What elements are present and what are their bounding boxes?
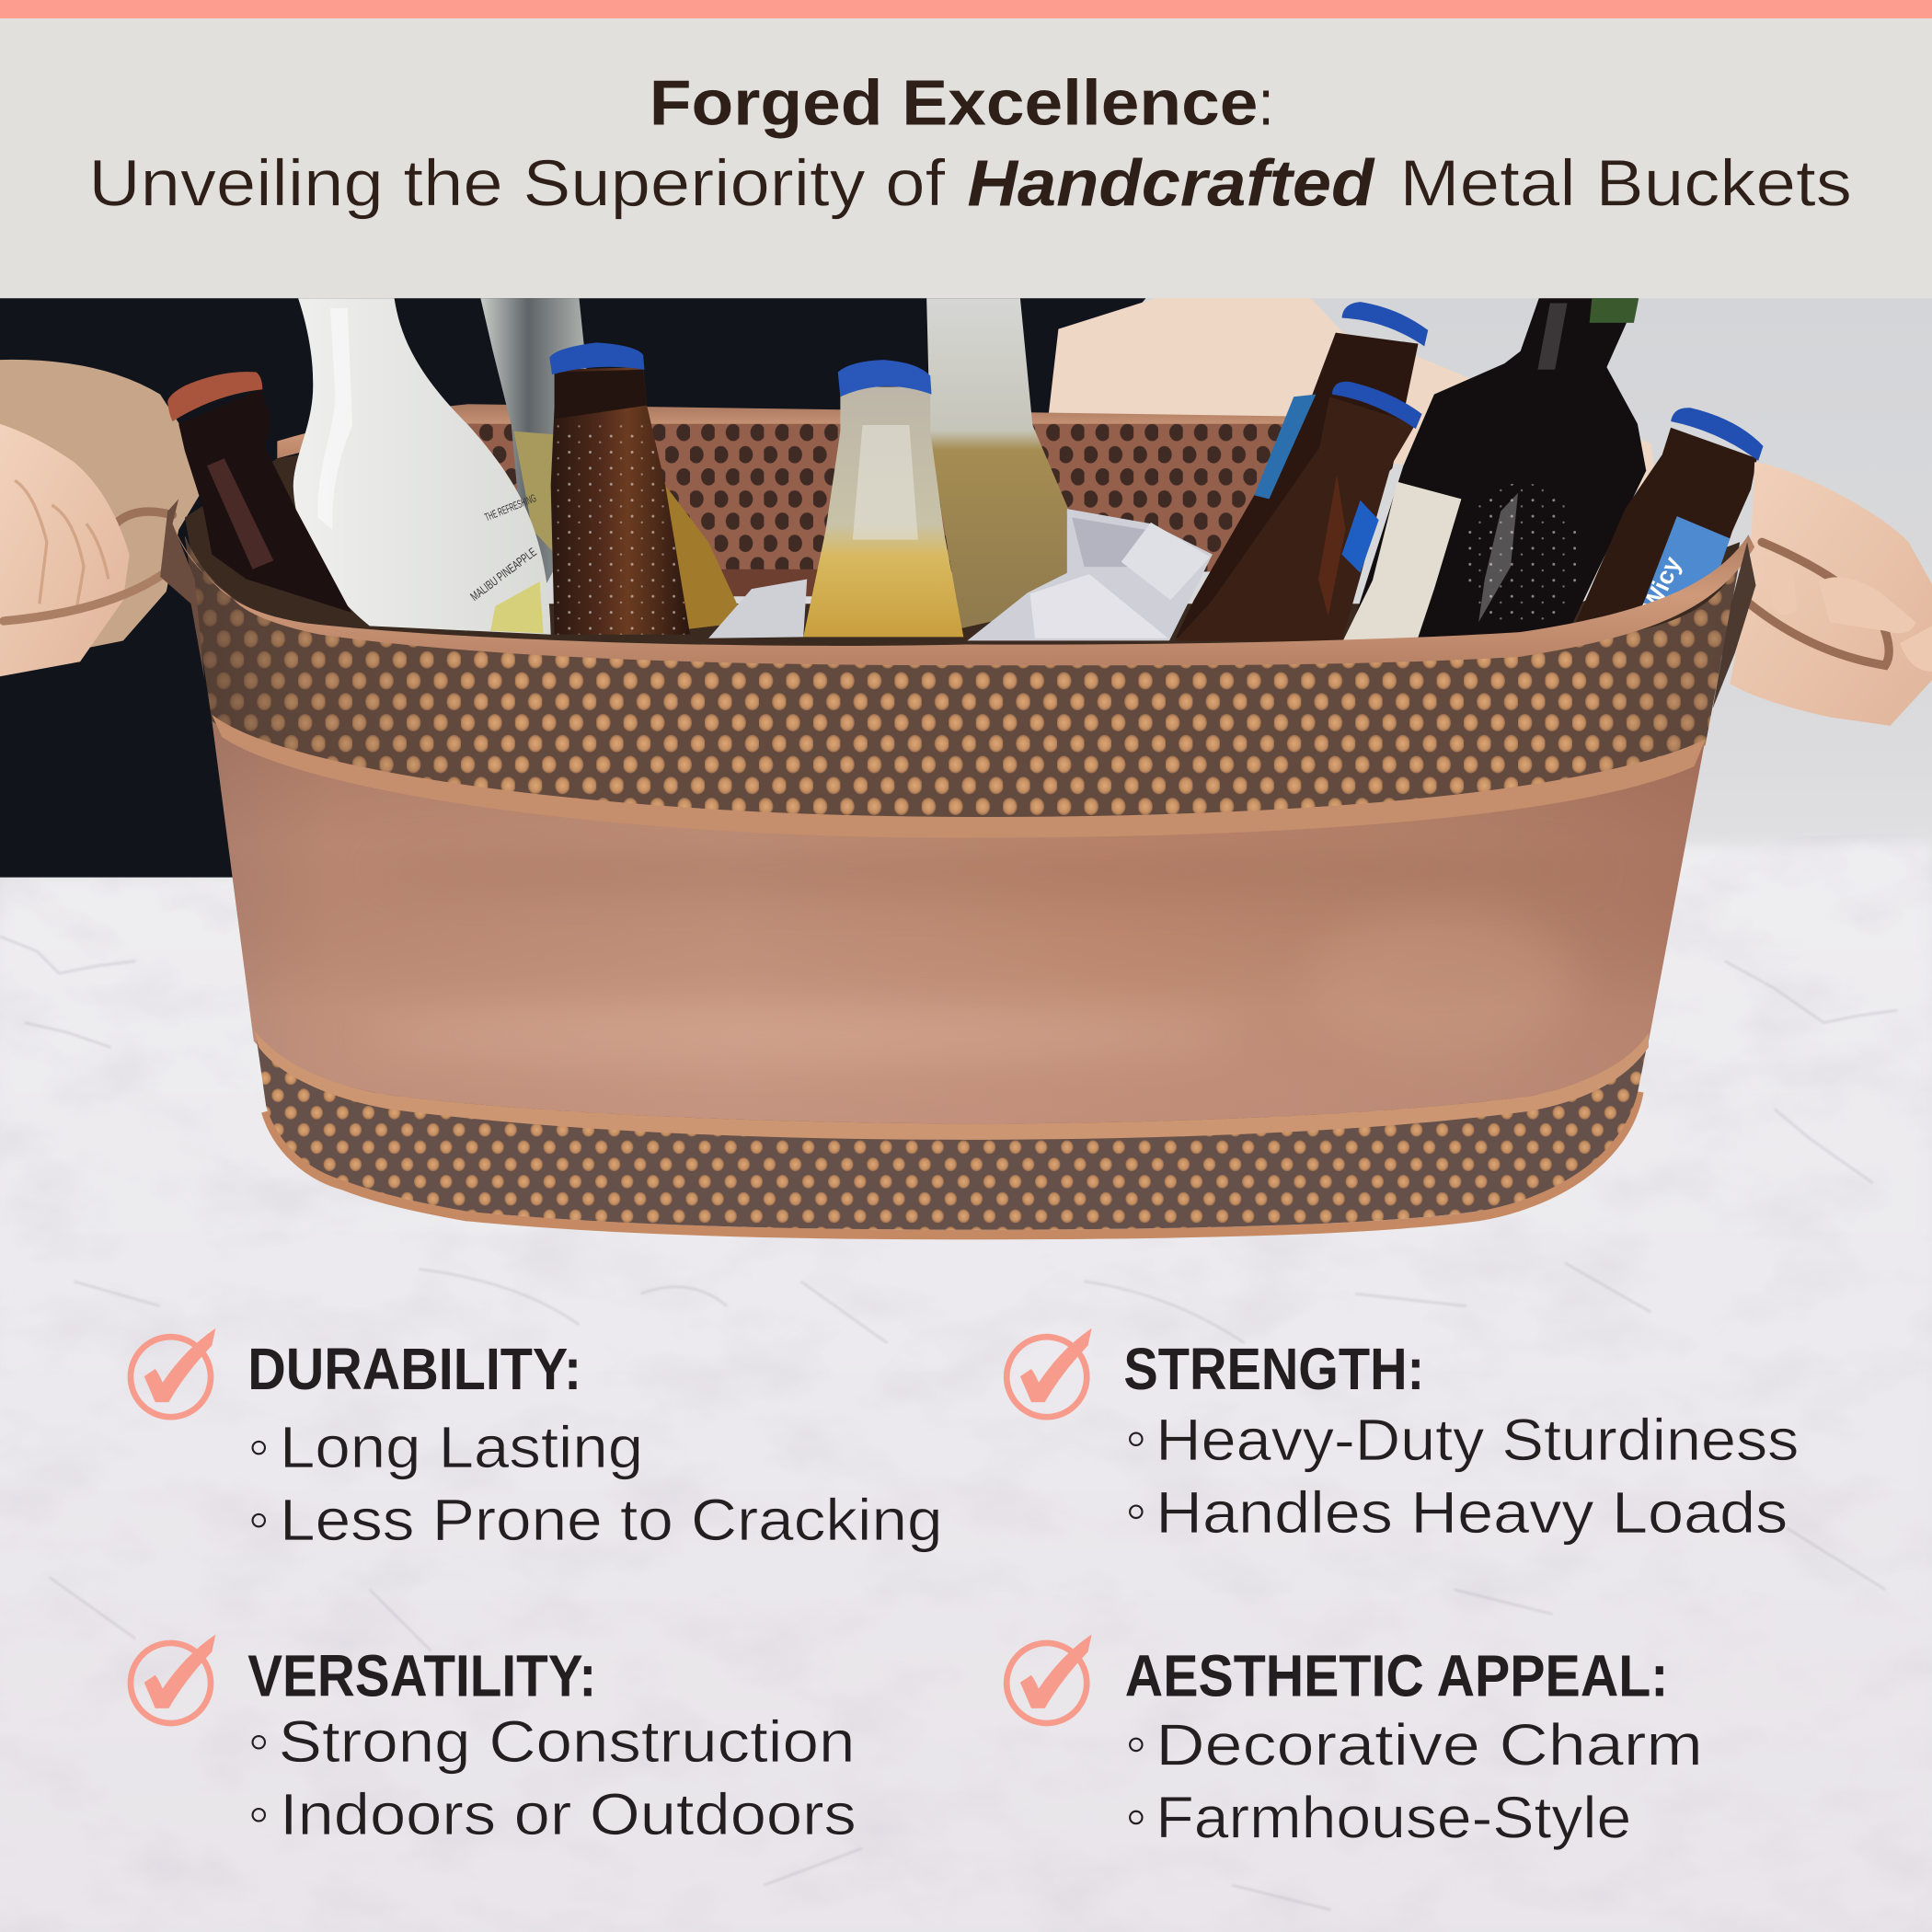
clear bottle, back left [480,298,587,592]
heading: STRENGTH: [1123,1336,1424,1402]
icon: check [1006,1328,1092,1417]
title: : [1258,66,1274,138]
right bracket [1713,542,1755,708]
top accent bar [0,0,1932,18]
marble countertop [0,813,1932,1932]
bullet text [253,1414,943,1553]
bullet text: Handles Heavy Loads [1156,1479,1788,1546]
brown bottle with blue label [1572,408,1764,631]
left hand [0,424,130,676]
bottom hammered band [257,1038,1649,1230]
subtitle: Unveiling the Superiority of [88,148,946,221]
amber bottle behind brown bottle [653,486,745,633]
bullet text [253,1708,857,1847]
feature: versatility [131,1635,857,1847]
heading: DURABILITY: [247,1336,581,1402]
bullet text [1130,1712,1703,1851]
yellow beer bottle [803,360,963,637]
person torso in black [0,298,1146,878]
left handle lower [4,571,167,621]
bullet text: Less Prone to Cracking [280,1487,943,1553]
bullet text: Long Lasting [280,1414,643,1480]
bullet text: Decorative Charm [1156,1712,1703,1778]
brown bottle, centre left [549,342,690,635]
bullet text [1130,1407,1799,1546]
white bottle with lettering: THE REFRESHING [483,491,538,523]
white bottle with lettering [293,298,551,635]
upper hammered band [185,536,1740,823]
header panel [0,18,1932,298]
bullet text: Indoors or Outdoors [280,1781,857,1847]
bucket interior hammered wall [462,424,1312,596]
dark bottle with copper cap [167,372,351,613]
clear bottle, back centre [926,298,1072,628]
bucket interior shadow [185,443,1740,653]
left forearm [0,359,199,648]
right fingers [1762,554,1932,672]
right arm [1047,298,1657,493]
icon: check [131,1635,215,1723]
bullet text: Heavy-Duty Sturdiness [1156,1407,1799,1473]
clear bottle back left: liquid [513,431,592,579]
brown bottle, back right [1176,302,1428,638]
brown bottle with blue label: Wicy [1638,552,1686,616]
brown bottle, front right [1176,382,1422,642]
icon: check [1006,1635,1092,1723]
subtitle: Handcrafted [967,148,1375,221]
feature: durability [131,1328,943,1553]
right hand [1730,462,1932,726]
heading: AESTHETIC APPEAL: [1125,1643,1668,1709]
left bracket [160,499,204,680]
icon: check [131,1328,215,1417]
plain band rim [212,715,1706,838]
feature: strength [1006,1328,1799,1546]
white bottle with lettering: MALIBU PINEAPPLE [467,545,539,604]
feature: aesthetic appeal [1006,1635,1703,1851]
bottom rim [266,1092,1639,1235]
ice cubes [708,509,1521,643]
heading: VERSATILITY: [247,1643,596,1709]
bullet text: Farmhouse-Style [1156,1785,1631,1851]
bucket body plain copper [212,720,1706,1133]
back rim of bucket [277,404,1306,458]
front top rim [173,523,1754,665]
subtitle: Metal Buckets [1399,148,1852,221]
wall background [546,298,1932,838]
left handle upper [116,512,173,523]
lower rim strip [254,1030,1649,1140]
subtitle [88,148,1852,221]
right handle [1750,542,1889,665]
title: Forged Excellence [650,66,1258,138]
bullet text: Strong Construction [279,1708,855,1775]
wine bottle, black [1343,298,1646,640]
